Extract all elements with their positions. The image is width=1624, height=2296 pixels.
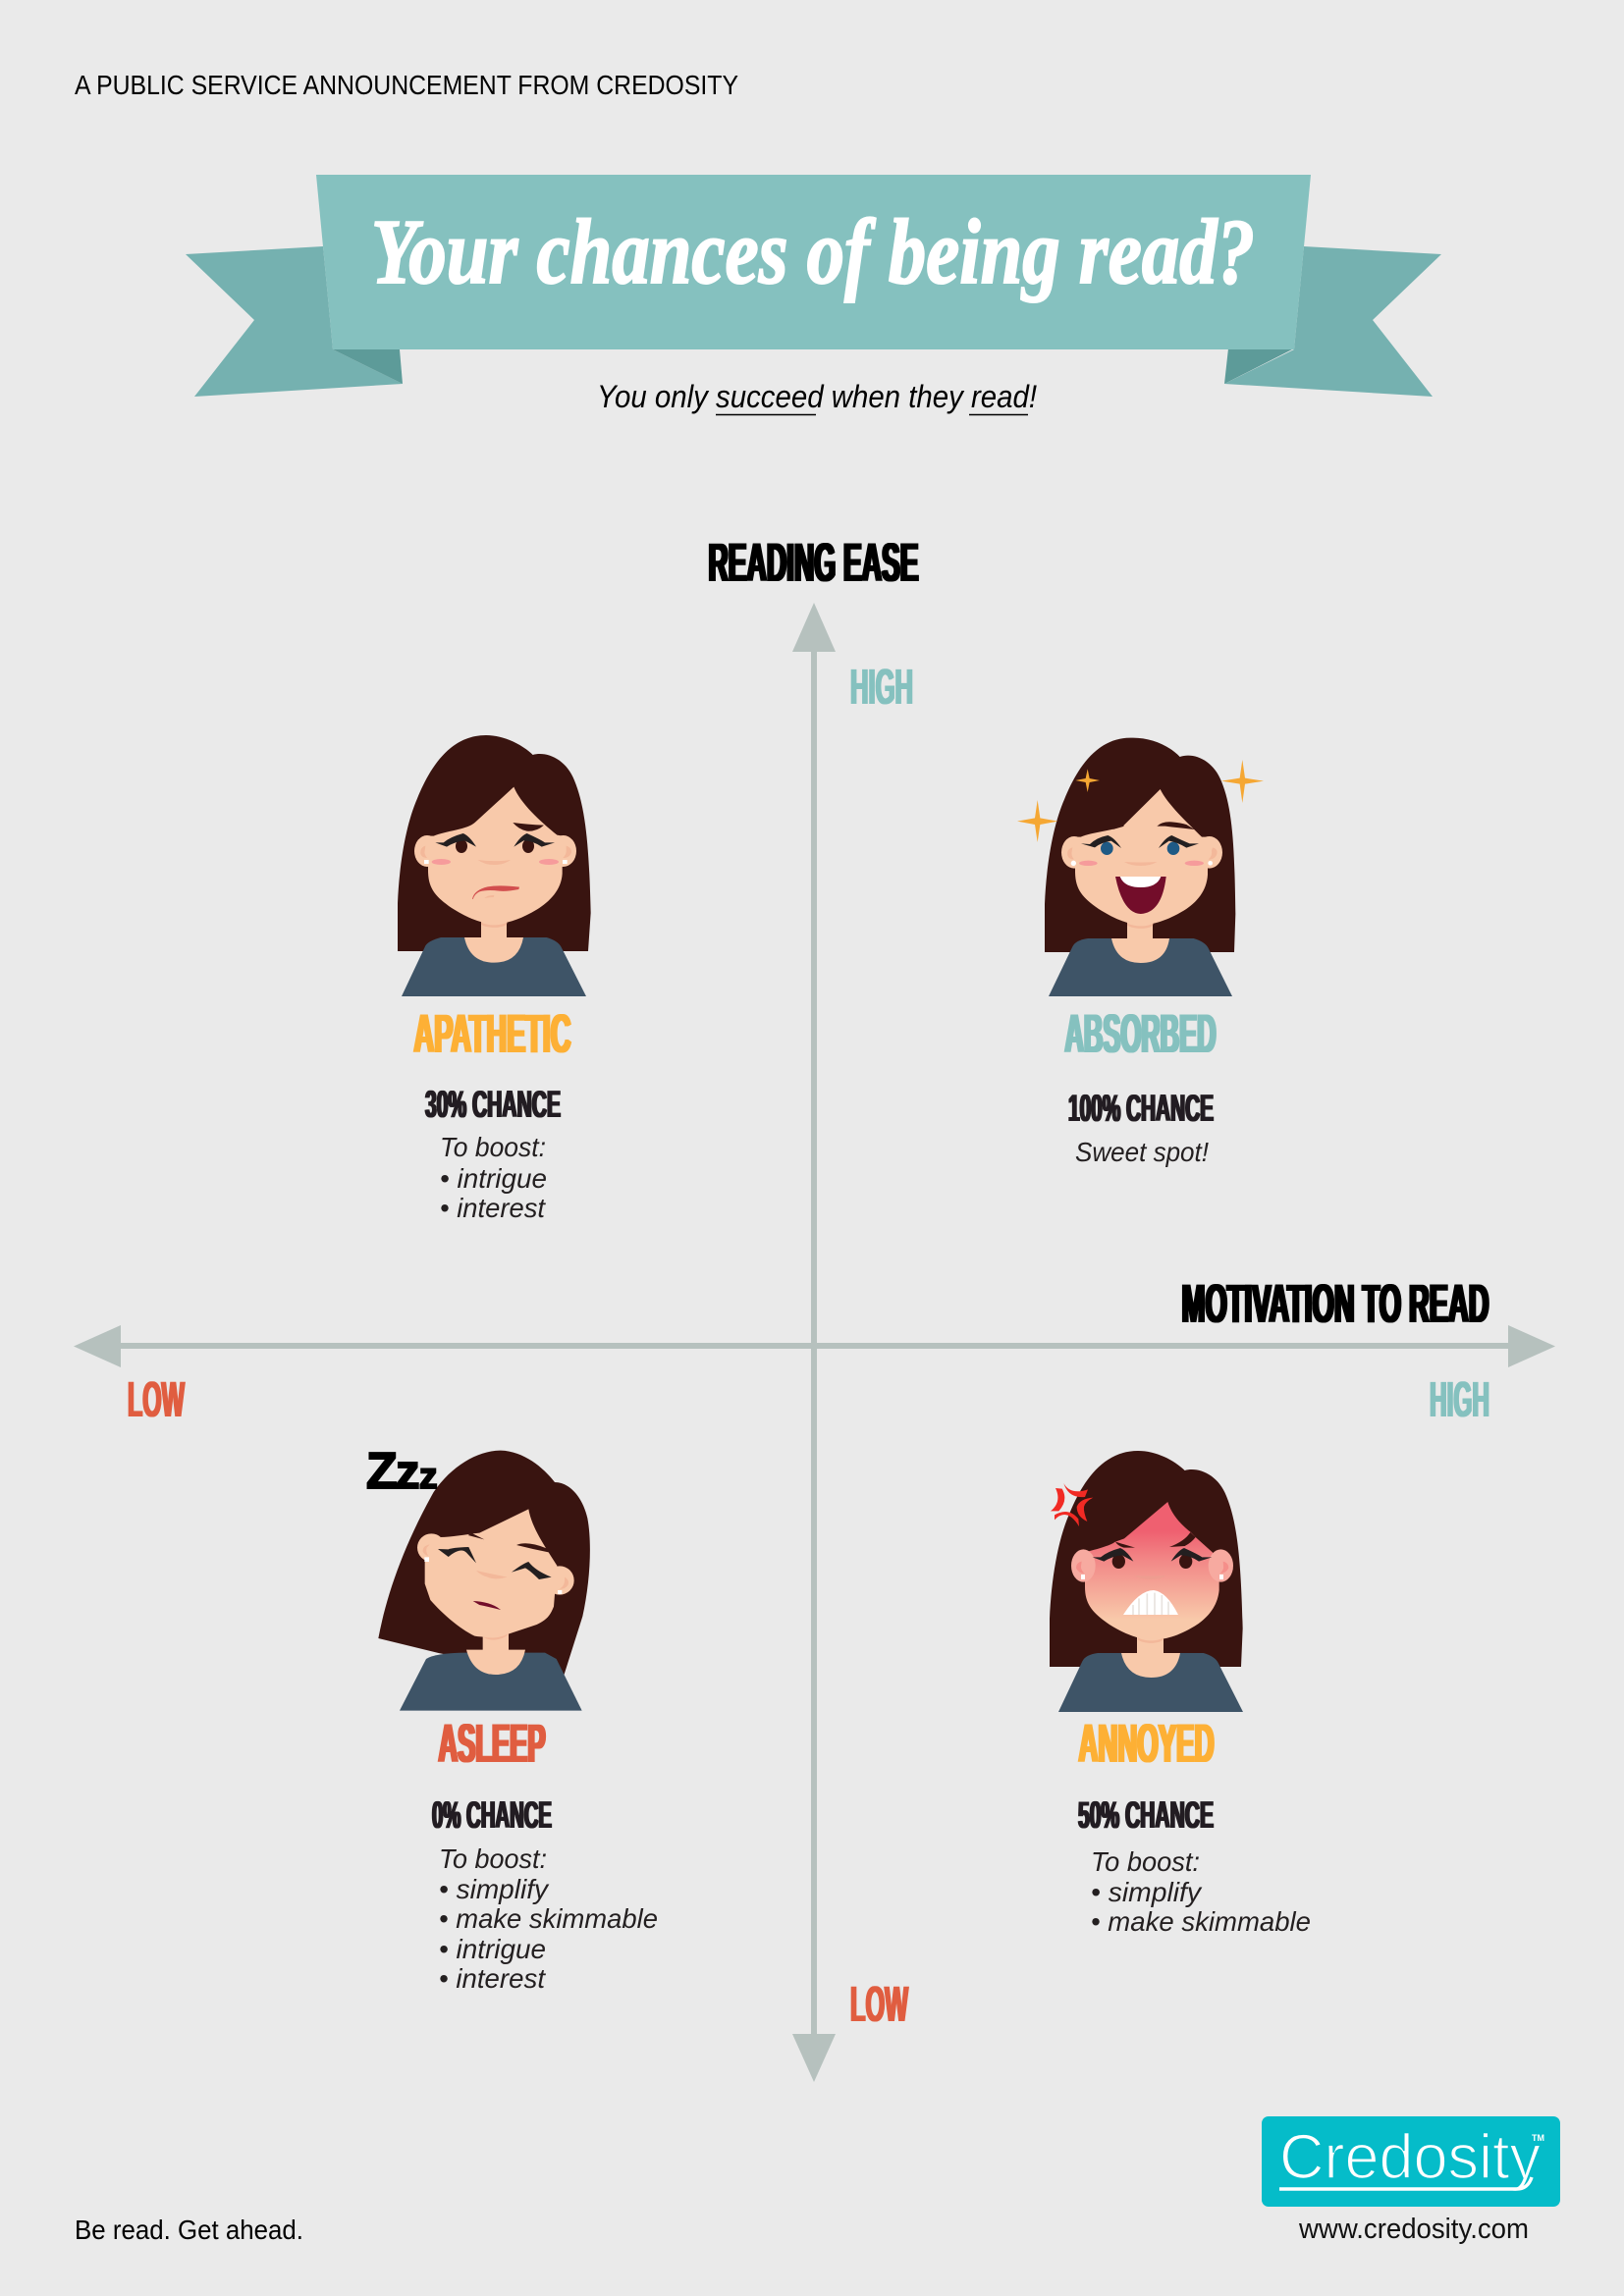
header line: A PUBLIC SERVICE ANNOUNCEMENT FROM CREDOSITY: [75, 70, 738, 100]
panel: asleep: [366, 1443, 658, 1994]
advice text: • intrigue: [439, 1934, 546, 1964]
icon: Zzz: z: [396, 1446, 420, 1499]
website url: www.credosity.com: [1298, 2214, 1529, 2245]
text: HIGH: [1430, 1371, 1489, 1427]
advice text: • simplify: [439, 1874, 550, 1904]
footer tagline: Be read. Get ahead.: [75, 2215, 303, 2245]
advice text: [1091, 1846, 1311, 1937]
icon: Zzz: z: [419, 1456, 438, 1496]
advice text: • make skimmable: [1091, 1906, 1311, 1937]
advice text: • interest: [440, 1193, 546, 1223]
chance: 50%: 50% CHANCE: [1078, 1794, 1214, 1837]
title banner: [186, 175, 1441, 397]
panel: absorbed: [1017, 738, 1264, 1167]
panel: apathetic: [398, 735, 591, 1223]
axis heading: reading ease: READING EASE: [709, 531, 919, 593]
advice text: • simplify: [1091, 1877, 1203, 1907]
logo: Credosity: [1262, 2116, 1560, 2207]
icon: annoyed face: [1050, 1451, 1243, 1712]
advice text: • make skimmable: [439, 1903, 658, 1934]
panel: asleep: ASLEEP: [438, 1712, 546, 1774]
text: LOW: [850, 1976, 908, 2032]
logo: Credosity: TM: [1532, 2133, 1544, 2143]
title banner: Your chances of being read?: [371, 201, 1255, 303]
name: apathetic: APATHETIC: [414, 1002, 571, 1064]
advice text: [440, 1132, 547, 1223]
advice text: • interest: [439, 1963, 546, 1994]
advice text: To boost:: [439, 1843, 547, 1874]
panel: annoyed: [1050, 1451, 1311, 1937]
icon: asleep face: [378, 1451, 590, 1711]
text: LOW: [128, 1371, 185, 1427]
icon: anger mark: [1051, 1483, 1093, 1526]
panel: absorbed: ABSORBED: [1064, 1002, 1216, 1064]
subtitle: You only succeed when they read!: [597, 379, 1037, 414]
advice text: [439, 1843, 658, 1994]
logo: Credosity: Credosity: [1279, 2121, 1541, 2192]
label: high reading ease: HIGH: [850, 659, 913, 715]
panel: annoyed: ANNOYED: [1078, 1712, 1214, 1774]
icon: Zzz: Z: [366, 1443, 398, 1500]
icon: sparkles: [1017, 760, 1264, 842]
icon: absorbed face: [1045, 738, 1235, 996]
chance: 30%: 30% CHANCE: [425, 1084, 561, 1126]
advice text: • intrigue: [440, 1163, 547, 1194]
advice text: To boost:: [440, 1132, 546, 1162]
advice text: To boost:: [1091, 1846, 1200, 1877]
vertical axis arrow: [792, 603, 836, 2082]
chance: 100%: 100% CHANCE: [1068, 1088, 1214, 1130]
advice text: Sweet spot!: [1075, 1137, 1209, 1167]
horizontal axis arrow: [74, 1325, 1555, 1367]
icon: apathetic face: [398, 735, 591, 996]
chance: 0%: 0% CHANCE: [432, 1794, 552, 1837]
